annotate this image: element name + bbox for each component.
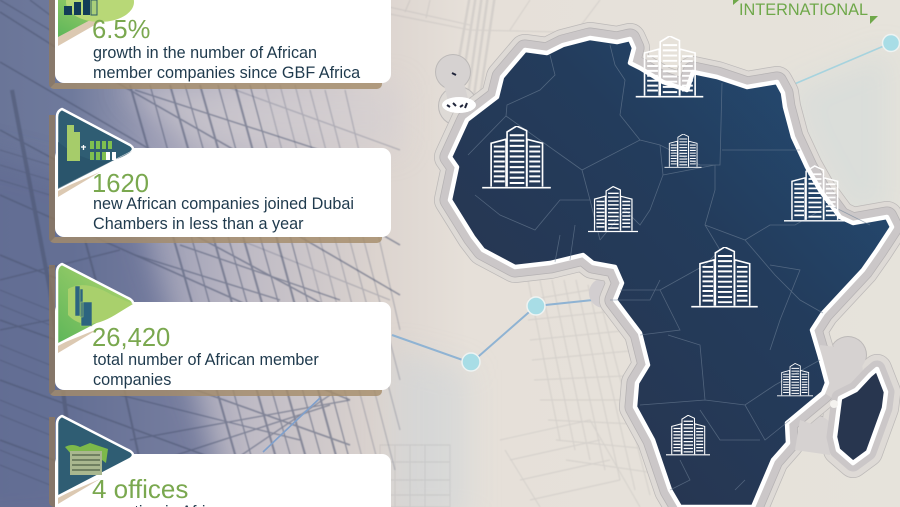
logo: International	[733, 0, 878, 24]
text: total members description: companies	[93, 370, 171, 388]
text: total members description	[93, 351, 319, 388]
icon: Africa towers triangle	[56, 262, 134, 353]
stat: 1620: 1620	[92, 170, 149, 198]
icon: building, Chad	[664, 134, 702, 167]
icon: building, Morocco	[482, 126, 551, 188]
panel: 1620 new companies	[49, 108, 391, 243]
text: growth description: growth in the number of African	[93, 44, 317, 62]
panel: 6.5% growth	[49, 0, 391, 89]
map: country borders	[468, 45, 870, 490]
icon: building, Congo	[691, 247, 758, 307]
panel: 26,420 total members	[49, 262, 391, 396]
icon: world map building triangle	[56, 414, 134, 504]
map: mainland	[450, 38, 892, 507]
icon: building, Tunisia	[636, 36, 703, 97]
text: new companies description	[93, 195, 354, 232]
icon: building, Tanzania	[777, 363, 813, 396]
icon: building, Niger	[588, 187, 638, 231]
text: new companies description: Chambers in less than a year	[93, 214, 304, 232]
logo: International: INTERNATIONAL	[739, 1, 868, 19]
icon: bar chart triangle	[58, 0, 134, 46]
stat: 26,420: 26,420	[92, 324, 170, 352]
stat: 4 offices: 4 offices	[92, 474, 188, 504]
panel: 4 offices	[49, 414, 391, 507]
icon: tower plus people triangle	[56, 108, 134, 197]
map halo: coastal contours	[435, 38, 892, 507]
text: new companies description: new African companies joined Dubai	[93, 195, 354, 213]
text: growth description: member companies since GBF Africa	[93, 64, 360, 82]
text: total members description: total number of African member	[93, 351, 319, 369]
map: Cape Verde / Canary islands	[442, 73, 838, 408]
stat: 6.5%: 6.5%	[92, 16, 150, 44]
icon: building, Angola	[666, 415, 710, 455]
icon: building, Ethiopia	[784, 166, 845, 221]
text: growth description	[93, 44, 360, 82]
map: Madagascar	[835, 369, 886, 463]
